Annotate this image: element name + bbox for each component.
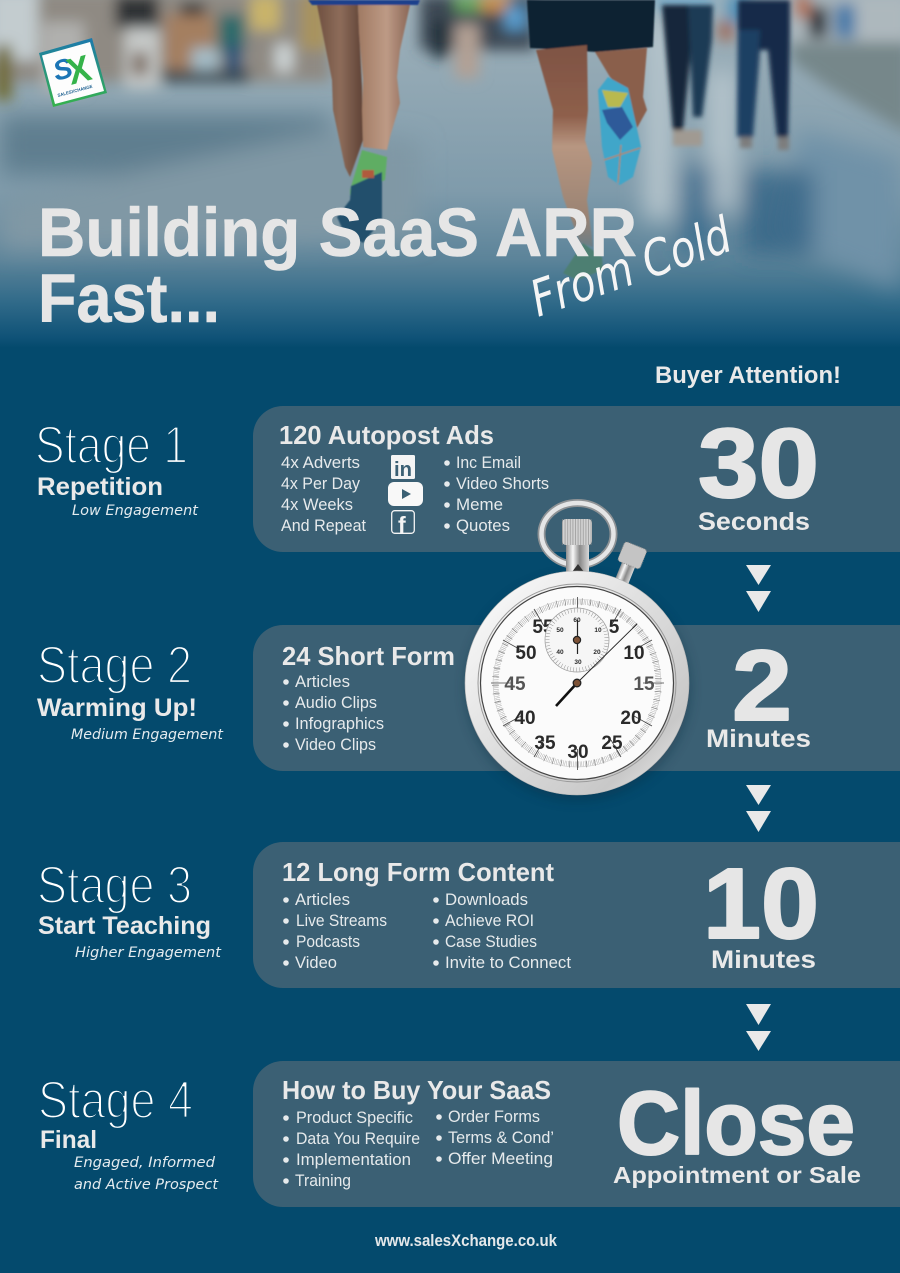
time: 10 minutes: Minutes [711, 946, 816, 974]
background figures [662, 0, 790, 150]
panel heading: 24 Short Form [282, 641, 455, 671]
list right: Invite to Connect [445, 954, 571, 972]
stage 1 label [35, 416, 199, 519]
icon: Facebook: f [398, 512, 406, 538]
stage 4 label: Final [40, 1126, 97, 1154]
side pusher [609, 541, 647, 589]
sub dial: 40 [556, 649, 564, 656]
stage 4 label: and Active Prospect [74, 1177, 219, 1193]
heading: Buyer Attention: Buyer Attention! [655, 362, 841, 389]
panel: stage 3 band [253, 842, 900, 988]
panel heading: 12 Long Form Content [282, 857, 554, 887]
stage 2 label: Medium Engagement [71, 727, 224, 743]
panel heading: How to Buy Your SaaS [282, 1075, 551, 1105]
list [283, 673, 384, 754]
schedule list [281, 454, 366, 535]
icon: LinkedIn [391, 455, 415, 481]
logo: salesXchange: S [50, 52, 76, 87]
crown ring [542, 503, 614, 565]
time: 2 minutes [706, 630, 811, 753]
sub dial: 10 [594, 627, 602, 634]
stage 3 label: Higher Engagement [75, 945, 222, 961]
outcome: close: Appointment or Sale [613, 1162, 861, 1188]
second hand [556, 624, 637, 706]
foreground runners [308, 0, 655, 280]
stage 1 label: Stage 1 [35, 416, 188, 475]
dial numbers: 35 [534, 733, 556, 754]
arrow: stage 3 to 4 [746, 1004, 771, 1051]
schedule list: 4x Per Day [281, 475, 361, 493]
list left: Product Specific [296, 1109, 413, 1127]
schedule list: 4x Adverts [281, 454, 360, 472]
dial numbers: 50 [515, 643, 537, 664]
sub dial: 20 [593, 649, 601, 656]
title: Building SaaS ARR [38, 194, 637, 271]
list right: Offer Meeting [448, 1150, 553, 1168]
panel: stage 2 band [253, 625, 900, 771]
panel heading: 120 Autopost Ads [279, 420, 494, 450]
list right: Achieve ROI [445, 912, 534, 930]
title: Fast... [38, 260, 220, 337]
list left: Video [295, 954, 337, 972]
dial numbers: 5 [609, 617, 620, 638]
panel: stage 4 band [253, 1061, 900, 1207]
time: 2 minutes: 2 [732, 630, 792, 742]
stage 2 label: Warming Up! [37, 694, 197, 722]
sub dial: 30 [574, 659, 582, 666]
dial numbers: 25 [601, 733, 623, 754]
list right: Downloads [445, 891, 528, 909]
schedule list: And Repeat [281, 517, 366, 535]
list left: Podcasts [296, 933, 360, 951]
stage 3 label [37, 856, 222, 961]
schedule list: 4x Weeks [281, 496, 353, 514]
icon: LinkedIn: in [394, 459, 412, 481]
subtitle: From Cold: From Cold [523, 206, 739, 328]
arrow: stage 2 to 3 [746, 785, 771, 832]
content type list: Video Shorts [456, 475, 549, 493]
crown stem and knob [562, 519, 592, 575]
list: Video Clips [295, 736, 376, 754]
content type list: Meme [456, 496, 503, 514]
case [465, 571, 689, 795]
icon: Facebook [392, 511, 414, 538]
logo: salesXchange [39, 38, 107, 107]
outcome: close: Close [617, 1074, 855, 1174]
footer url: www.salesXchange.co.uk [374, 1231, 557, 1250]
stage 1 label: Low Engagement [72, 503, 199, 519]
list: Audio Clips [295, 694, 377, 712]
logo: salesXchange: X [62, 47, 96, 93]
list right [433, 891, 571, 972]
dial numbers: 40 [514, 708, 536, 729]
stage 2 label: Stage 2 [37, 636, 192, 695]
time: 10 minutes: 10 [703, 848, 819, 960]
dial numbers [504, 617, 655, 763]
list left: Live Streams [296, 912, 387, 930]
list right: Case Studies [445, 933, 537, 951]
list right: Terms & Cond’ [448, 1129, 554, 1147]
list left [283, 1109, 420, 1190]
stage 2 label [37, 636, 224, 743]
stopwatch [465, 503, 690, 800]
content type list: Inc Email [456, 454, 521, 472]
time: 30 seconds: 30 [698, 408, 819, 518]
time: 2 minutes: Minutes [706, 725, 811, 753]
hero photo: runners on a wet road [0, 0, 900, 348]
time: 30 seconds: Seconds [698, 508, 810, 536]
stage 4 label: Stage 4 [38, 1071, 193, 1130]
list: Infographics [295, 715, 384, 733]
list left: Implementation [296, 1151, 411, 1169]
stage 4 label [38, 1071, 219, 1193]
sub dial [545, 608, 609, 672]
list: Articles [295, 673, 350, 691]
sub dial: 50 [556, 627, 564, 634]
arrow: stage 1 to 2 [746, 565, 771, 612]
logo: salesXchange: SALESXCHANGE [57, 84, 93, 98]
dial numbers: 10 [623, 643, 645, 664]
dial numbers: 55 [532, 617, 554, 638]
list left: Data You Require [296, 1130, 420, 1148]
content type list [444, 454, 549, 535]
content type list: Quotes [456, 517, 510, 535]
minute tick rings [493, 599, 661, 767]
panel: stage 1 band [253, 406, 900, 552]
list right [436, 1108, 554, 1168]
list left: Articles [295, 891, 350, 909]
dial numbers: 20 [620, 708, 642, 729]
title [38, 194, 637, 337]
stage 3 label: Stage 3 [37, 856, 192, 915]
dial numbers: 45 [504, 674, 526, 695]
stage 3 label: Start Teaching [38, 912, 211, 940]
icon: YouTube [388, 482, 423, 506]
list left: Training [295, 1172, 351, 1190]
stage 4 label: Engaged, Informed [74, 1155, 215, 1171]
list left [283, 891, 387, 972]
dial numbers: 30 [567, 742, 589, 763]
sub dial: 60 [573, 617, 581, 624]
list right: Order Forms [448, 1108, 540, 1126]
stage 1 label: Repetition [37, 473, 163, 501]
dial numbers: 15 [633, 674, 655, 695]
